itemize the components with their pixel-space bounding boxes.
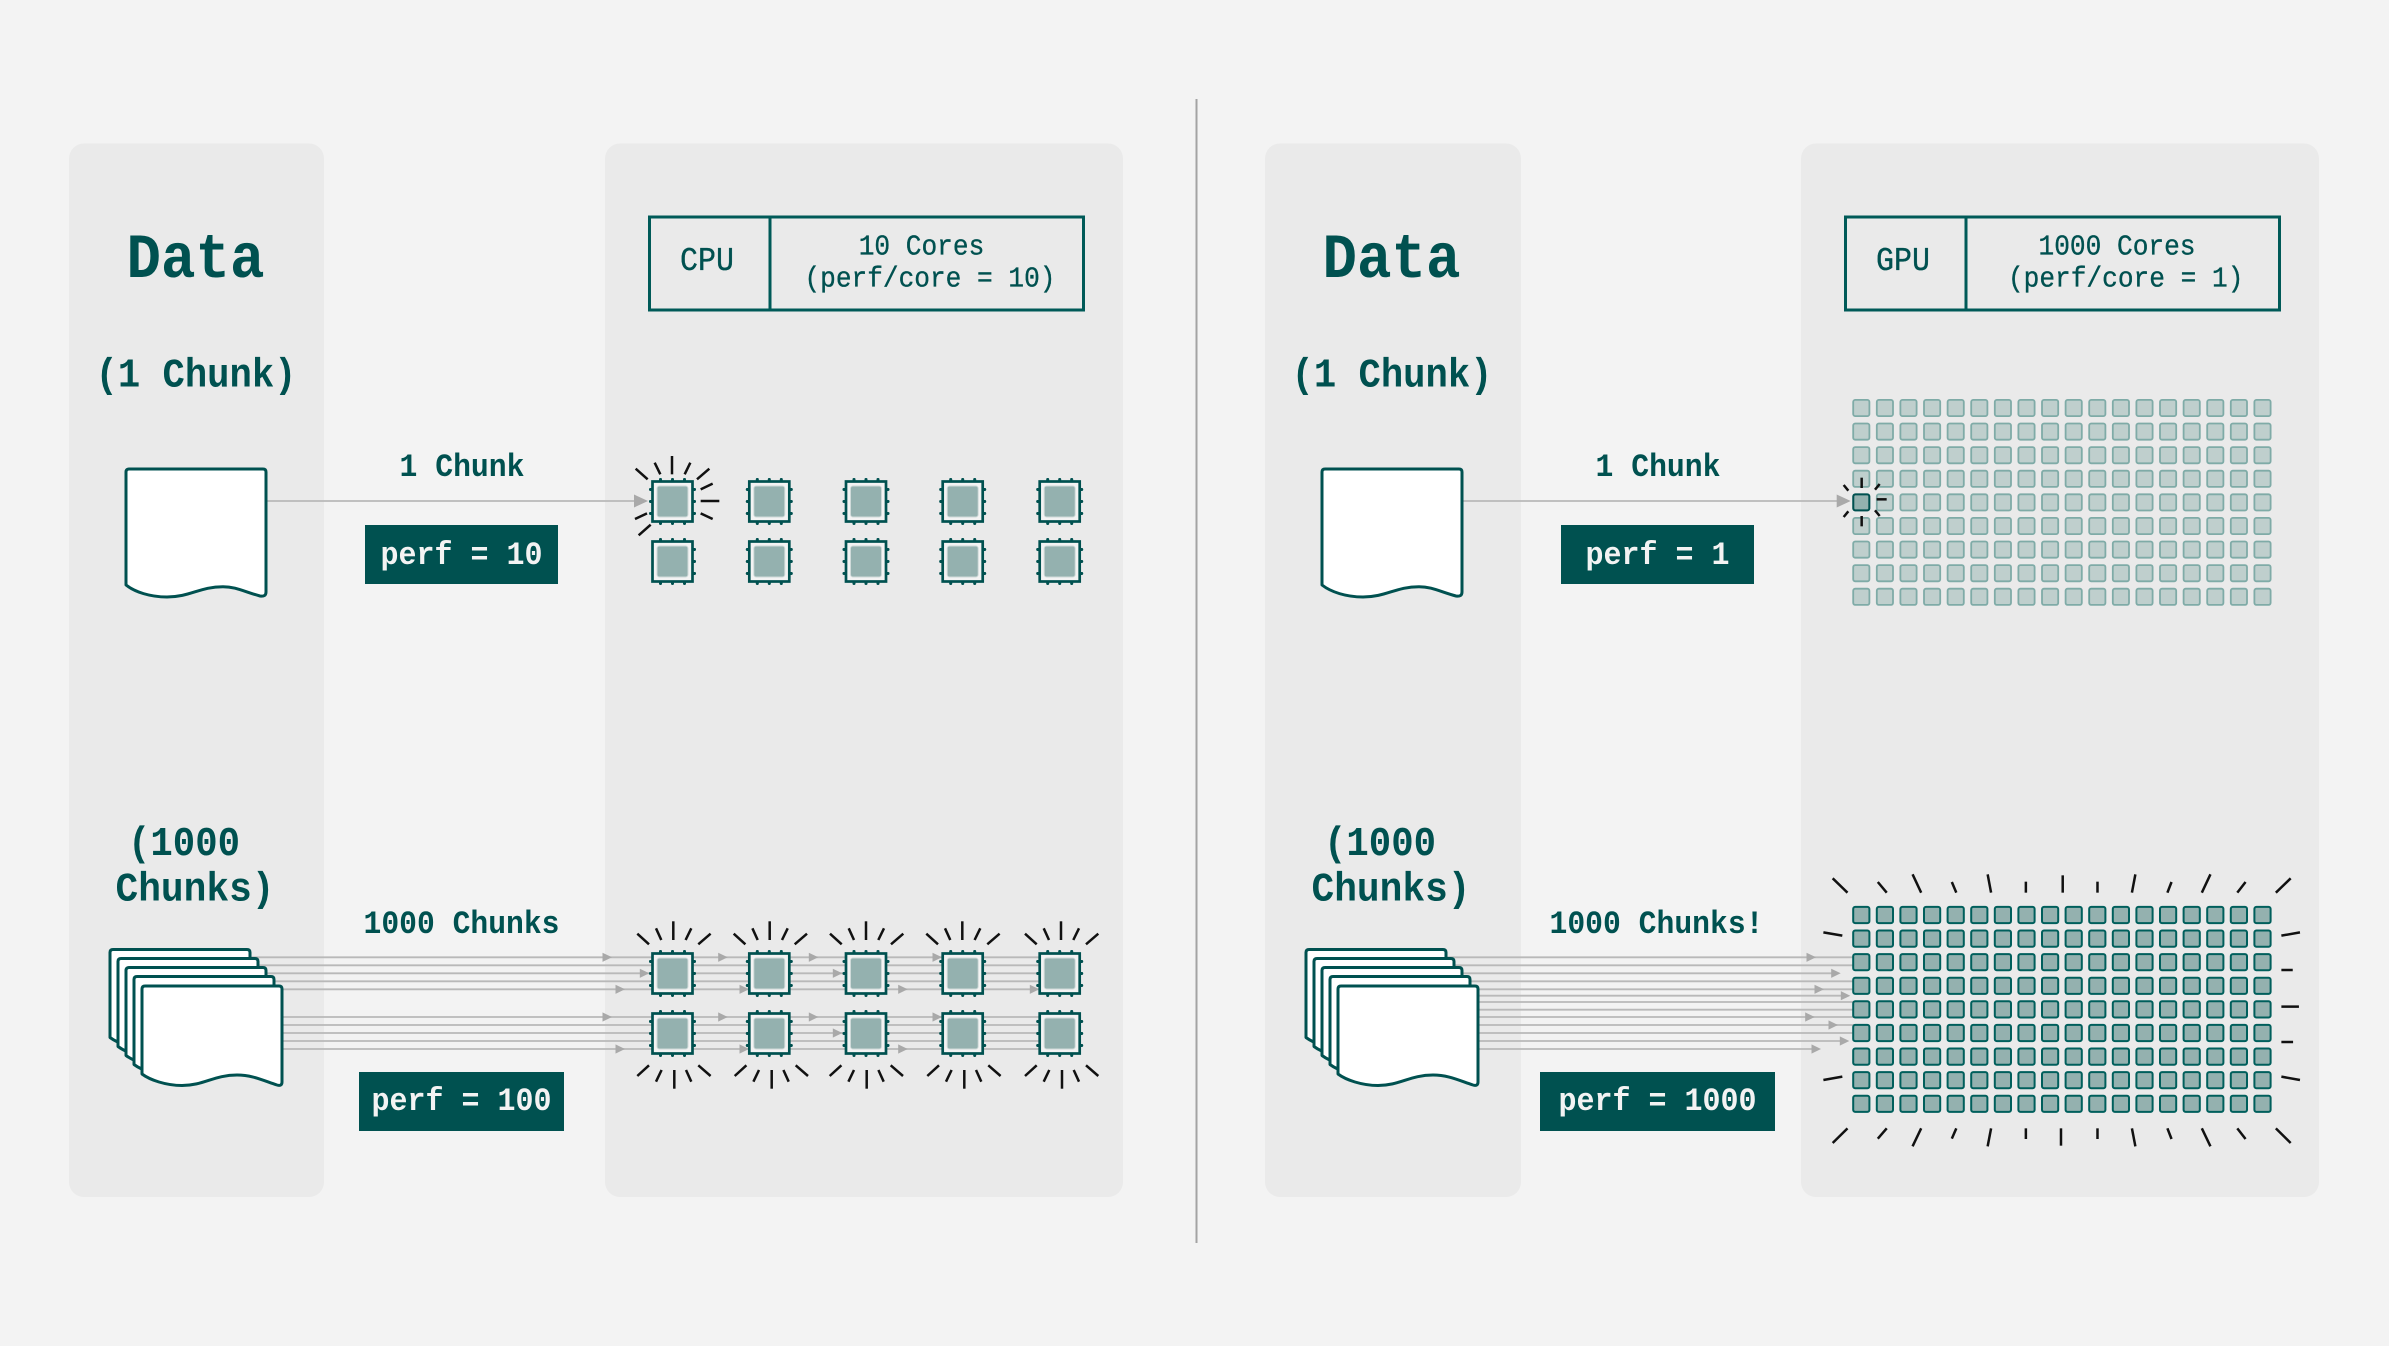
label: 1 Chunk transfer: 1 Chunk — [400, 449, 524, 486]
label: chunks continuation: Chunks) — [116, 868, 274, 914]
badge: perf = 1000 — [1540, 1072, 1775, 1131]
CPU header box: (perf/core = 10) — [804, 262, 1056, 296]
heading: Data: Data — [126, 225, 264, 296]
label: 1 Chunk transfer: 1 Chunk — [1596, 449, 1720, 486]
panel: CPU cores column — [605, 144, 1123, 1197]
GPU header box: GPU — [1876, 243, 1930, 280]
panel: GPU data column — [1265, 144, 1521, 1197]
badge: perf = 100 — [359, 1072, 564, 1131]
icon: single document — [126, 469, 266, 597]
section: GPU comparison — [1292, 217, 2300, 1146]
label: 1000 chunks: (1000 — [1324, 822, 1436, 868]
arrows: 1000 chunks spread over GPU cores — [1446, 953, 1854, 1054]
arrows: 1000 chunks spread over CPU cores — [250, 953, 1060, 1054]
badge: perf = 1 — [1561, 525, 1754, 584]
label: 1000 Chunks transfer: 1000 Chunks — [364, 906, 560, 943]
arrow: single chunk to first CPU core — [266, 494, 648, 508]
GPU header box: (perf/core = 1) — [2008, 262, 2243, 296]
icon: stack of documents — [1306, 950, 1478, 1086]
label: 1 chunk: (1 Chunk) — [1292, 354, 1492, 400]
activity rays around all CPU cores — [637, 921, 1098, 1089]
badge: perf = 10 — [365, 525, 558, 584]
activity rays around first CPU core — [635, 456, 719, 535]
label: chunks continuation: Chunks) — [1312, 868, 1470, 914]
icon: single document — [1322, 469, 1462, 597]
activity rays around first GPU core — [1844, 478, 1887, 526]
label: 1 chunk: (1 Chunk) — [96, 354, 296, 400]
badge: perf = 100: perf = 100 — [372, 1083, 552, 1120]
arrow: single chunk to first GPU core — [1462, 494, 1851, 508]
heading: Data: Data — [1322, 225, 1460, 296]
CPU chip grid: one core active — [649, 478, 1083, 585]
GPU header box: 1000 Cores — [2038, 230, 2196, 264]
CPU chip grid: all cores active — [649, 950, 1083, 1057]
icon: stack of documents — [110, 950, 282, 1086]
panel: GPU cores column — [1801, 144, 2319, 1197]
divider between CPU and GPU — [1196, 99, 1198, 1243]
activity rays around GPU grid — [1823, 874, 2300, 1146]
panel: CPU data column — [69, 144, 324, 1197]
label: 1000 chunks: (1000 — [128, 822, 240, 868]
badge: perf = 1: perf = 1 — [1586, 537, 1730, 574]
label: 1000 Chunks! transfer: 1000 Chunks! — [1550, 906, 1764, 943]
GPU core grid: one core active — [1853, 400, 2271, 605]
active GPU core — [1853, 494, 1869, 510]
CPU header box: 10 Cores — [859, 230, 984, 264]
badge: perf = 1000: perf = 1000 — [1558, 1083, 1756, 1120]
section: CPU comparison — [96, 217, 1098, 1131]
GPU core grid: all cores active — [1853, 907, 2271, 1112]
CPU header box — [650, 217, 1084, 310]
CPU header box: CPU — [680, 243, 734, 280]
GPU header box — [1846, 217, 2280, 310]
badge: perf = 10: perf = 10 — [380, 537, 542, 574]
